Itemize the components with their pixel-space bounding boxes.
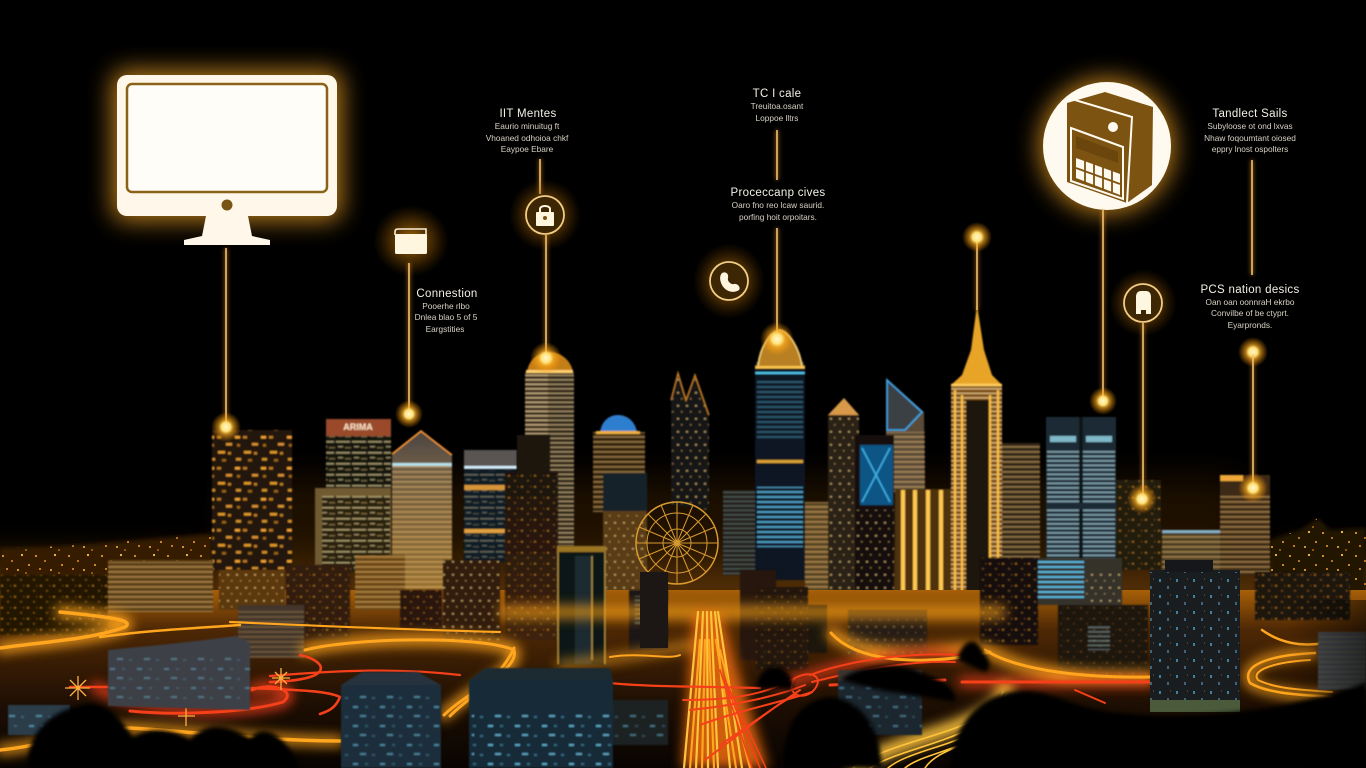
- tree silhouettes: [28, 641, 1366, 768]
- text: proceccanp cives: Proceccanp cives: [731, 187, 825, 199]
- text: proceccanp cives: [731, 187, 825, 222]
- tower: lower block: [315, 488, 391, 572]
- tower: golden spire: [951, 305, 1002, 600]
- connector dot: [1127, 484, 1157, 514]
- foreground block center: [469, 668, 613, 768]
- text: connection: Connestion: [416, 288, 478, 300]
- text: TC1 cale: TC I cale: [753, 88, 801, 100]
- icon: lock: [526, 196, 564, 234]
- tower: far right: [1220, 475, 1270, 575]
- distant city lights: [0, 518, 1366, 610]
- connector dot: [211, 412, 241, 442]
- text: connection: [415, 288, 478, 334]
- road network: [0, 612, 1340, 768]
- building: dark tower with blue windows: [1150, 560, 1240, 712]
- text: connection: Eargstities: [426, 324, 464, 334]
- tower: pyramid top: [828, 398, 859, 590]
- text: connection: Dnlea blao 5 of 5: [415, 312, 478, 322]
- tower: blue twin: [1046, 417, 1116, 567]
- text: tandlect sails: eppry lnost ospolters: [1212, 144, 1288, 154]
- text: PCS nation desics: Oan oan oonnraH ekrbo: [1205, 297, 1295, 307]
- callout: big device icon: [1039, 78, 1175, 415]
- tower: pentagon roof: [392, 431, 452, 590]
- text: IT mentes: Eaurio minuitug ft: [495, 121, 560, 131]
- tower: slim lower: [603, 473, 647, 591]
- tower: left of blue spire: [723, 490, 756, 575]
- tower: wedge blue: [886, 378, 925, 492]
- yellow curved roads: [853, 692, 1012, 768]
- text: IT mentes: [486, 108, 569, 154]
- text: TC1 cale: Treuitoa.osant: [751, 101, 804, 111]
- connector dot: [760, 322, 794, 356]
- callout: IT mentes: [486, 108, 581, 374]
- tower: blue band: [464, 450, 517, 562]
- callout: monitor icon: [112, 70, 342, 442]
- tower: blue striped with gold crown: [755, 330, 805, 580]
- foreground buildings: [8, 632, 1366, 768]
- road glow: [0, 612, 1332, 768]
- back row towers: [212, 305, 1270, 607]
- text: proceccanp cives: porfing hoit orpoitars.: [739, 212, 817, 222]
- tower: blue dome: [593, 415, 645, 512]
- connector dot: [530, 342, 562, 374]
- right edge vignette: [1290, 600, 1366, 768]
- callout: connection: [373, 205, 478, 428]
- ferris wheel: [636, 502, 718, 584]
- icon: arch: [1124, 284, 1162, 322]
- callout: small device icon: [1109, 269, 1177, 514]
- text: tandlect sails: Nhaw foqoumtant oiosed: [1204, 133, 1296, 143]
- slim building in front of wheel: [640, 572, 668, 648]
- tower: right mid: [1116, 480, 1161, 570]
- text: tandlect sails: Tandlect Sails: [1212, 108, 1288, 120]
- connector dot: [1089, 387, 1117, 415]
- icon: monitor: [117, 75, 337, 245]
- tower: tan right of blue: [805, 502, 833, 592]
- connector dot upper: [1238, 337, 1268, 367]
- tower: beehive with gold dome: [525, 352, 574, 546]
- small blocks: [8, 700, 668, 745]
- callout: proceccanp cives: [731, 187, 825, 356]
- text: PCS nation desics: [1200, 284, 1300, 330]
- callout: PCS nation desics: [1200, 284, 1300, 503]
- text: TC1 cale: Loppoe lltrs: [756, 113, 798, 123]
- text: tandlect sails: [1204, 108, 1296, 154]
- far right grey block: [1318, 632, 1366, 690]
- tower: striped pale: [1002, 443, 1040, 561]
- icon: phone circle: [693, 243, 765, 319]
- text: PCS nation desics: Eyarpronds.: [1228, 320, 1272, 330]
- text: connection: Pooerhe rlbo: [422, 301, 470, 311]
- foreground block center left: [341, 672, 441, 768]
- callout: TC1 cale: [751, 88, 804, 180]
- callout: tandlect sails: [1204, 108, 1296, 275]
- text: proceccanp cives: Oaro fno reo lcaw saurid.: [732, 200, 824, 210]
- amber roads: [0, 612, 1340, 750]
- tower: twin spire: [671, 373, 709, 510]
- star flares: [65, 668, 290, 726]
- ground: [0, 590, 1366, 768]
- icon: device in circle: [1043, 82, 1171, 210]
- tower: amber office: [212, 430, 292, 570]
- connector: spire dot: [962, 222, 992, 310]
- tower: sign-topped block: [326, 419, 391, 491]
- text: TC1 cale: [751, 88, 804, 123]
- tower: dark blue panel: [855, 435, 894, 607]
- text: IT mentes: Vhoaned odhoioa chkf: [486, 133, 569, 143]
- foreground block right: [838, 670, 922, 735]
- middle row buildings: [0, 435, 1350, 675]
- city glow haze: [0, 480, 1366, 640]
- connector dot: [395, 400, 423, 428]
- text: IT mentes: Eaypoe Ebare: [501, 144, 554, 154]
- icon: folder: [395, 229, 427, 254]
- text: IT mentes: IIT Mentes: [499, 108, 557, 120]
- foreground block left: [108, 636, 250, 710]
- central highway: [684, 612, 766, 768]
- tower: gold vertical fins: [895, 489, 951, 600]
- tower: low wide right: [1162, 530, 1222, 572]
- text: PCS nation desics: Convilbe of be ctyprt.: [1211, 308, 1289, 318]
- connector dot lower: [1238, 473, 1268, 503]
- red roads: [70, 654, 1150, 760]
- text: PCS nation desics: PCS nation desics: [1200, 284, 1300, 296]
- text: tandlect sails: Subyloose ot ond lxvas: [1207, 121, 1293, 131]
- tower: sign-topped block: ARIMA: [343, 422, 373, 432]
- city skyline illustration: [0, 305, 1366, 768]
